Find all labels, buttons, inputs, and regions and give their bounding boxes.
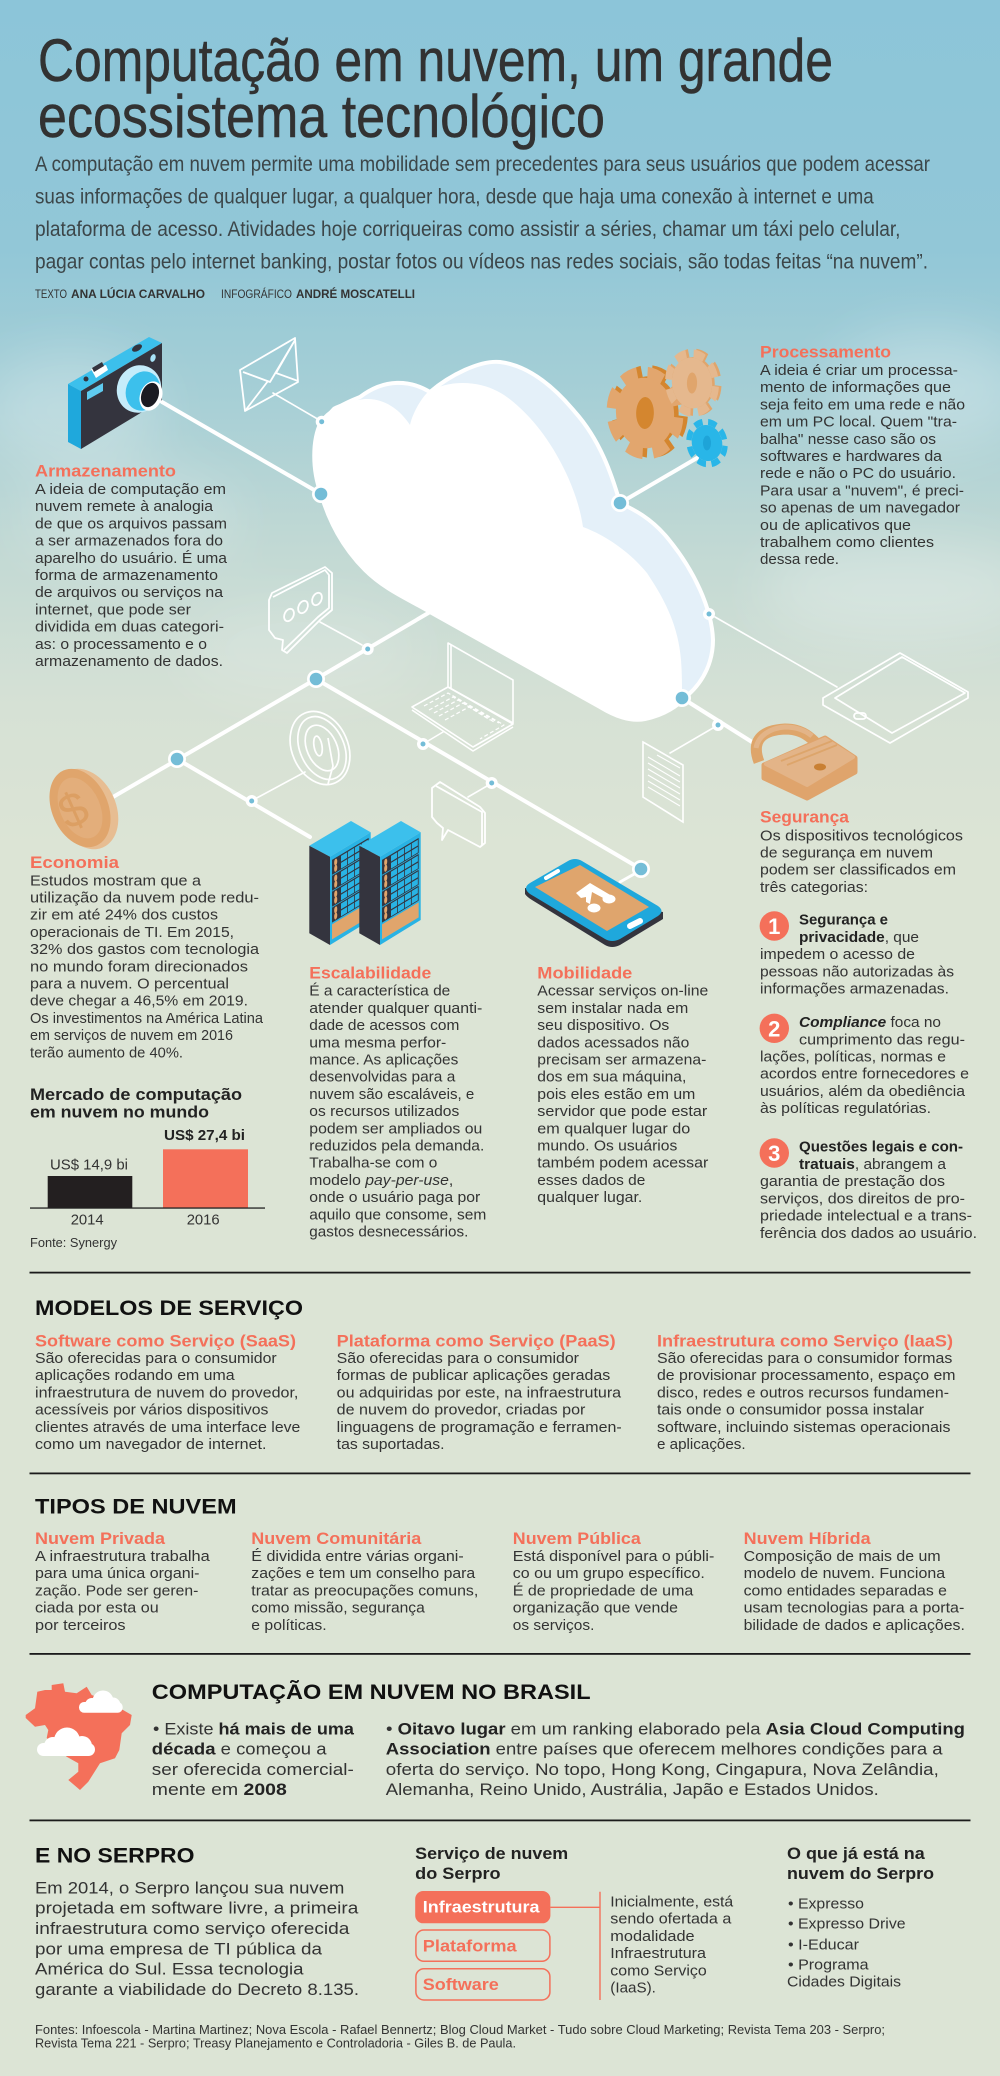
text: segurança: Segurança	[760, 807, 850, 826]
column: SaaS: São oferecidas para o consumidor	[35, 1350, 277, 1367]
column: PaaS: linguagens de programação e ferramen-	[337, 1419, 622, 1436]
text: armazenamento: nuvem remete à analogia	[35, 498, 214, 515]
icon: cloud	[314, 362, 713, 720]
chart title	[30, 1086, 242, 1121]
text: armazenamento: aparelho do usuário. É uma	[35, 550, 228, 567]
column: PaaS: Plataforma como Serviço (PaaS)	[337, 1331, 616, 1350]
column: híbrida: Nuvem Híbrida	[744, 1529, 871, 1548]
icon: document	[643, 742, 683, 822]
text: segurança: Os dispositivos tecnológicos	[760, 827, 963, 844]
text: mobilidade: Mobilidade	[537, 963, 632, 982]
column: PaaS	[337, 1331, 622, 1453]
text: processamento: Para usar a "nuvem", é preci-	[760, 482, 964, 499]
heading: COMPUTAÇÃO EM NUVEM NO BRASIL	[152, 1679, 591, 1704]
text: economia: Economia	[30, 853, 120, 872]
left bullet: ser oferecida comercial-	[152, 1760, 354, 1779]
gear: blue	[688, 419, 726, 467]
side note: (IaaS).	[610, 1980, 656, 1997]
network connector lines	[113, 393, 837, 882]
text: processamento: A ideia é criar um processa-	[760, 362, 958, 379]
title	[38, 27, 833, 150]
text: processamento	[760, 343, 965, 568]
text: mobilidade: também podem acessar	[537, 1155, 708, 1172]
text: escalabilidade: gastos desnecessários.	[309, 1224, 468, 1240]
text: escalabilidade	[309, 963, 486, 1240]
section: computação em nuvem no brasil	[152, 1679, 965, 1799]
column: pública: Nuvem Pública	[513, 1529, 641, 1548]
text: economia: terão aumento de 40%.	[30, 1044, 183, 1061]
text: armazenamento: A ideia de computação em	[35, 481, 226, 498]
bar 2016	[163, 1149, 248, 1208]
credits: ANDRÉ MOSCATELLI	[296, 286, 415, 301]
text: mobilidade: dos em sua máquina,	[537, 1069, 686, 1086]
column: comunitária: como missão, segurança	[251, 1600, 425, 1617]
column: IaaS: de provisionar processamento, espaço em	[657, 1367, 956, 1384]
text: processamento: softwares e hardwares da	[760, 448, 943, 465]
column: PaaS: ou adquiridas por este, na infraestrutura	[337, 1384, 622, 1401]
item 2: usuários, além da obediência	[760, 1083, 966, 1100]
column: PaaS: São oferecidas para o consumidor	[337, 1350, 579, 1367]
list items	[787, 1896, 906, 1991]
column: IaaS: São oferecidas para o consumidor formas	[657, 1350, 953, 1367]
body: infraestrutura como serviço oferecida	[35, 1919, 350, 1938]
bar 2014	[48, 1176, 132, 1208]
icon: servers	[309, 821, 421, 945]
text: armazenamento: de que os arquivos passam	[35, 515, 227, 532]
column: SaaS: clientes através de uma interface leve	[35, 1419, 300, 1436]
side note: como Serviço	[610, 1962, 707, 1979]
text: escalabilidade: os recursos utilizados	[309, 1103, 460, 1120]
side note	[610, 1894, 734, 1997]
cloud: lower	[37, 1728, 95, 1756]
text: escalabilidade: onde o usuário paga por	[309, 1189, 480, 1206]
text: segurança: podem ser classificados em	[760, 862, 956, 879]
text: escalabilidade: É a característica de	[309, 983, 450, 1000]
section: e no serpro	[35, 1844, 359, 1999]
column: pública	[513, 1529, 714, 1634]
text: armazenamento: internet, que pode ser	[35, 601, 191, 618]
text: mobilidade: mundo. Os usuários	[537, 1138, 678, 1154]
text: escalabilidade: Escalabilidade	[309, 963, 431, 982]
box: plataforma	[416, 1930, 550, 1961]
icon: laptop	[412, 643, 513, 751]
text: mobilidade: seu dispositivo. Os	[537, 1017, 670, 1034]
right bullet: Alemanha, Reino Unido, Austrália, Japão e Estados Unidos.	[386, 1780, 879, 1799]
gear: large	[609, 366, 685, 458]
right bullet: Association entre países que oferecem melhores condições para a	[386, 1739, 943, 1758]
column: híbrida: usam tecnologias para a porta-	[744, 1600, 964, 1617]
column: PaaS: tas suportadas.	[337, 1436, 444, 1453]
column: comunitária: e políticas.	[251, 1617, 327, 1634]
text: armazenamento: de arquivos ou serviços na	[35, 584, 224, 601]
item 1: informações armazenadas.	[760, 981, 949, 998]
column: privada: por terceiros	[35, 1617, 126, 1634]
body: por uma empresa de TI pública da	[35, 1939, 323, 1958]
text: escalabilidade: dade de acessos com	[309, 1017, 459, 1034]
column: IaaS: software, incluindo sistemas operacionais	[657, 1419, 951, 1436]
column: privada: zação. Pode ser geren-	[35, 1582, 198, 1599]
item 1: 1	[768, 914, 780, 939]
gear: medium	[667, 349, 719, 416]
diagram heading: do Serpro	[415, 1865, 501, 1883]
text: armazenamento: dividida em duas categori-	[35, 619, 224, 636]
section: modelos de serviço	[35, 1296, 956, 1453]
item 2: acordos entre fornecedores e	[760, 1066, 969, 1083]
chart title: em nuvem no mundo	[30, 1103, 209, 1121]
text: mobilidade: Acessar serviços on-line	[537, 983, 708, 1000]
text: processamento: dessa rede.	[760, 551, 839, 568]
body: garante a viabilidade do Decreto 8.135.	[35, 1980, 359, 1999]
column: híbrida: modelo de nuvem. Funciona	[744, 1565, 946, 1582]
icon: tablet	[823, 653, 968, 743]
text: processamento: mento de informações que	[760, 379, 951, 396]
network nodes	[168, 416, 724, 878]
list items: • Expresso Drive	[788, 1916, 906, 1933]
icon: gears	[609, 349, 726, 467]
title: Computação em nuvem, um grande	[38, 27, 833, 94]
text: escalabilidade: aquilo que consome, sem	[309, 1206, 486, 1223]
column: SaaS: como um navegador de internet.	[35, 1436, 266, 1453]
text: mobilidade: servidor que pode estar	[537, 1103, 707, 1120]
icon: coin	[38, 758, 130, 860]
icon: padlock	[756, 727, 855, 798]
chart title: Mercado de computação	[30, 1086, 242, 1104]
column: pública: É de propriedade de uma	[513, 1582, 694, 1599]
text: mobilidade	[537, 963, 708, 1206]
text: escalabilidade: podem ser ampliados ou	[309, 1120, 482, 1137]
box: infraestrutura: Infraestrutura	[423, 1898, 540, 1917]
left bullet	[152, 1719, 355, 1799]
text: processamento: ou de aplicativos que	[760, 517, 911, 534]
icon: envelope	[240, 338, 298, 411]
column: pública: os serviços.	[513, 1617, 594, 1634]
column: comunitária: tratar as preocupações comuns,	[251, 1582, 478, 1599]
text: escalabilidade: reduzidos pela demanda.	[309, 1138, 484, 1154]
side note: sendo ofertada a	[610, 1911, 732, 1928]
text: processamento: Processamento	[760, 343, 891, 362]
item 1: privacidade, que	[799, 929, 919, 946]
intro text: plataforma de acesso. Atividades hoje corriqueiras como assistir a séries, chamar um táxi pelo celular,	[35, 218, 900, 241]
item 2: às políticas regulatórias.	[760, 1100, 931, 1117]
icon: camera	[68, 337, 168, 449]
box: software: Software	[423, 1975, 499, 1994]
text: escalabilidade: nuvem são escaláveis, e	[309, 1086, 474, 1103]
list heading: O que já está na	[787, 1845, 926, 1863]
column: híbrida: bilidade de dados e aplicações.	[744, 1617, 965, 1634]
list heading	[787, 1845, 934, 1883]
text: escalabilidade: atender qualquer quanti-	[309, 1000, 482, 1017]
intro text	[35, 153, 930, 274]
text: armazenamento: forma de armazenamento	[35, 567, 218, 584]
item 3	[760, 1138, 977, 1242]
sources: Fontes: Infoescola - Martina Martinez; Nova Escola - Rafael Bennertz; Blog Cloud Market - Tudo sobre Cloud Marketing; Revista Tema 203 - Serpro;	[35, 2023, 885, 2037]
side note: Infraestrutura	[610, 1945, 707, 1962]
column: IaaS: disco, redes e outros recursos fundamen-	[657, 1384, 949, 1401]
text: processamento: trabalhem como clientes	[760, 534, 934, 551]
icon: smartphone	[525, 859, 663, 947]
credits: TEXTO	[35, 287, 67, 301]
intro text: suas informações de qualquer lugar, a qualquer hora, desde que haja uma conexão à internet e uma	[35, 186, 874, 209]
text: escalabilidade: desenvolvidas para a	[309, 1069, 456, 1086]
body: Em 2014, o Serpro lançou sua nuvem	[35, 1878, 344, 1897]
column: IaaS	[657, 1331, 956, 1453]
credits: ANA LÚCIA CARVALHO	[71, 286, 205, 301]
column: PaaS: formas de publicar aplicações geradas	[337, 1367, 611, 1384]
column: PaaS: de nuvem do provedor, criadas por	[337, 1402, 585, 1419]
chart source: Fonte: Synergy	[30, 1236, 118, 1250]
text: segurança	[760, 807, 977, 1242]
item 1: impedem o acesso de	[760, 946, 915, 963]
item 3: garantia de prestação dos	[760, 1173, 945, 1190]
column: privada: ciada por esta ou	[35, 1600, 159, 1617]
right bullet	[386, 1719, 965, 1799]
column: IaaS: Infraestrutura como Serviço (IaaS)	[657, 1331, 953, 1350]
credits	[35, 286, 415, 301]
list: o que já está na nuvem do serpro	[787, 1845, 934, 1991]
title: ecossistema tecnológico	[38, 83, 605, 150]
text: armazenamento	[35, 462, 228, 670]
item 2: Compliance foca no	[799, 1014, 941, 1031]
value labels: 2016	[187, 1211, 220, 1228]
column: IaaS: e aplicações.	[657, 1436, 746, 1453]
column: SaaS: Software como Serviço (SaaS)	[35, 1331, 296, 1350]
item 3: tratuais, abrangem a	[799, 1156, 947, 1173]
left bullet: década e começou a	[152, 1739, 327, 1758]
icon: at sign	[279, 702, 361, 794]
text: escalabilidade: Trabalha-se com o	[309, 1155, 437, 1172]
column: comunitária: zações e tem um conselho para	[251, 1565, 476, 1582]
list items: • Programa	[788, 1956, 869, 1973]
text: processamento: balha" nesse caso são os	[760, 431, 936, 448]
text: mobilidade: em qualquer lugar do	[537, 1120, 690, 1137]
icon: brazil map with clouds	[26, 1683, 132, 1790]
server rack: right	[359, 821, 421, 945]
cloud: upper	[79, 1690, 123, 1713]
text: segurança: três categorias:	[760, 879, 868, 896]
item 3: 3	[768, 1141, 780, 1166]
text: escalabilidade: uma mesma perfor-	[309, 1034, 446, 1051]
item 2: lações, políticas, normas e	[760, 1048, 946, 1066]
item 1	[760, 911, 954, 998]
column: híbrida: Composição de mais de um	[744, 1548, 941, 1565]
right bullet: • Oitavo lugar em um ranking elaborado pela Asia Cloud Computing	[386, 1719, 965, 1738]
text: economia: Estudos mostram que a	[30, 872, 202, 889]
column: SaaS	[35, 1331, 300, 1453]
heading: MODELOS DE SERVIÇO	[35, 1296, 303, 1320]
text: escalabilidade: modelo pay-per-use,	[309, 1172, 453, 1189]
value labels: US$ 14,9 bi	[50, 1156, 128, 1173]
value labels: 2014	[71, 1211, 104, 1228]
text: armazenamento: Armazenamento	[35, 462, 176, 481]
text: processamento: so apenas de um navegador	[760, 500, 960, 517]
item 1: pessoas não autorizadas às	[760, 964, 954, 980]
section: tipos de nuvem	[35, 1494, 965, 1634]
text: segurança: de segurança em nuvem	[760, 844, 933, 862]
body: América do Sul. Essa tecnologia	[35, 1959, 304, 1978]
body	[35, 1878, 359, 1999]
text: escalabilidade: mance. As aplicações	[309, 1052, 459, 1068]
bar chart: mercado de computação em nuvem	[30, 1086, 265, 1250]
column: SaaS: aplicações rodando em uma	[35, 1367, 235, 1384]
intro text: pagar contas pelo internet banking, postar fotos ou vídeos nas redes sociais, são todas feitas “na nuvem”.	[35, 251, 928, 274]
text: mobilidade: sem instalar nada em	[537, 1000, 688, 1017]
text: armazenamento: armazenamento de dados.	[35, 653, 223, 670]
left bullet: mente em 2008	[152, 1780, 287, 1799]
box: software	[416, 1969, 550, 2000]
column: privada: para uma única organi-	[35, 1565, 200, 1582]
column: pública: co ou um grupo específico.	[513, 1565, 705, 1582]
column: comunitária: É dividida entre várias organi-	[251, 1548, 464, 1565]
text: mobilidade: precisam ser armazena-	[537, 1052, 706, 1068]
text: processamento: em um PC local. Quem "tra-	[760, 414, 957, 431]
heading: E NO SERPRO	[35, 1844, 194, 1868]
body: projetada em software livre, a primeira	[35, 1898, 359, 1917]
column: híbrida	[744, 1529, 965, 1634]
item 3: ferência dos dados ao usuário.	[760, 1225, 977, 1242]
column: pública: Está disponível para o públi-	[513, 1548, 714, 1565]
text: economia: deve chegar a 46,5% em 2019.	[30, 993, 248, 1010]
column: privada: A infraestrutura trabalha	[35, 1548, 210, 1565]
icon: second chat bubble	[432, 782, 485, 847]
text: economia: zir em até 24% dos custos	[30, 907, 218, 924]
column: comunitária: Nuvem Comunitária	[251, 1529, 422, 1548]
text: economia: em serviços de nuvem em 2016	[30, 1027, 233, 1044]
right bullet: oferta do serviço. No topo, Hong Kong, Cingapura, Nova Zelândia,	[386, 1760, 939, 1779]
column: comunitária	[251, 1529, 478, 1634]
list items: • Expresso	[788, 1896, 864, 1913]
item 2: cumprimento das regu-	[799, 1031, 965, 1048]
value labels	[50, 1127, 245, 1228]
sources: Revista Tema 221 - Serpro; Treasy Planejamento e Controladoria - Giles B. de Paula.	[35, 2037, 516, 2051]
server rack: left	[309, 821, 371, 945]
item 3: serviços, dos direitos de pro-	[760, 1190, 965, 1208]
icon: chat bubble	[269, 567, 332, 653]
text: economia: 32% dos gastos com tecnologia	[30, 941, 260, 958]
item 2	[760, 1014, 969, 1117]
column: IaaS: tais onde o consumidor possa instalar	[657, 1402, 924, 1419]
item 2: 2	[768, 1016, 780, 1041]
text: armazenamento: as: o processamento e o	[35, 636, 207, 653]
text: economia: no mundo foram direcionados	[30, 958, 248, 975]
sources	[35, 2023, 885, 2051]
text: processamento: rede e não o PC do usuário.	[760, 465, 956, 482]
list heading: nuvem do Serpro	[787, 1865, 934, 1883]
text: economia: Os investimentos na América Latina	[30, 1010, 264, 1027]
list items: • I-Educar	[788, 1936, 859, 1953]
text: economia: para a nuvem. O percentual	[30, 976, 229, 992]
text: mobilidade: qualquer lugar.	[537, 1189, 642, 1206]
left bullet: • Existe há mais de uma	[153, 1719, 355, 1738]
column: pública: organização que vende	[513, 1600, 678, 1617]
list items: Cidades Digitais	[787, 1974, 901, 1991]
text: economia: operacionais de TI. Em 2015,	[30, 924, 234, 941]
text: armazenamento: a ser armazenados fora do	[35, 533, 223, 550]
diagram: serviço de nuvem do serpro	[415, 1845, 734, 2000]
item 3: priedade intelectual e a trans-	[760, 1208, 972, 1225]
column: SaaS: acessíveis por vários dispositivos	[35, 1402, 269, 1419]
item 1: Segurança e	[799, 912, 888, 929]
box: plataforma: Plataforma	[423, 1937, 517, 1956]
text: mobilidade: dados acessados não	[537, 1034, 689, 1051]
diagram heading	[415, 1845, 568, 1883]
text: mobilidade: pois eles estão em um	[537, 1086, 695, 1103]
text: economia	[30, 853, 264, 1061]
column: híbrida: como entidades separadas e	[744, 1582, 947, 1599]
item 3: Questões legais e con-	[799, 1139, 963, 1156]
column: SaaS: infraestrutura de nuvem do provedor,	[35, 1384, 298, 1401]
heading: TIPOS DE NUVEM	[35, 1494, 237, 1518]
diagram heading: Serviço de nuvem	[415, 1845, 568, 1863]
text: mobilidade: esses dados de	[537, 1172, 645, 1189]
side note: modalidade	[610, 1928, 695, 1945]
side note: Inicialmente, está	[610, 1894, 734, 1911]
text: economia: utilização da nuvem pode redu-	[30, 890, 259, 906]
credits: INFOGRÁFICO	[221, 286, 292, 301]
icon: coin: $	[51, 781, 97, 840]
box: infraestrutura	[415, 1891, 550, 1923]
value labels: US$ 27,4 bi	[164, 1127, 245, 1144]
connector	[550, 1892, 600, 2000]
column: privada: Nuvem Privada	[35, 1529, 166, 1548]
text: processamento: seja feito em uma rede e não	[760, 396, 965, 413]
column: privada	[35, 1529, 210, 1634]
